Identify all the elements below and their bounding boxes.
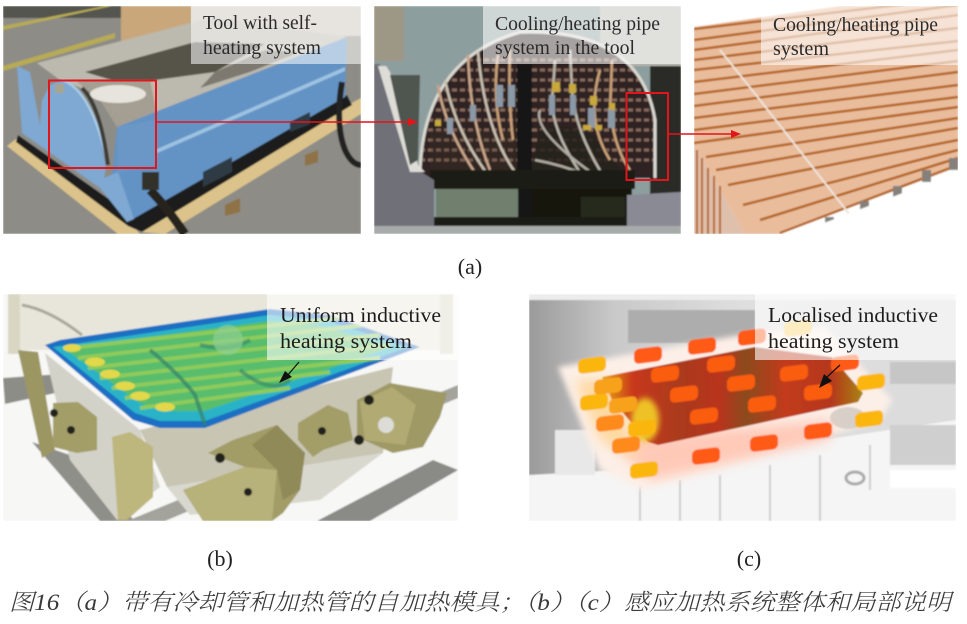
label text: heating system [280,329,412,353]
label text: Localised inductive [768,303,938,327]
label box [483,6,681,64]
pale plate [558,327,892,490]
heating tiles [578,319,885,479]
panel: uniform inductive heating [3,294,458,521]
wooden pallet [7,139,140,234]
caption (c): (c) [737,546,761,571]
panel: tool with self-heating system [3,6,361,234]
lower floor [436,189,518,217]
pipes [694,0,958,234]
arrow: pipe system to detail [626,93,741,180]
heat map [45,309,420,428]
centre post [517,64,532,234]
label text: Tool with self- [203,13,317,34]
panel: cooling/heating pipes in the tool [374,6,681,234]
label box [755,294,956,360]
soft glow [610,420,830,480]
black base [16,95,352,232]
pipe fittings [447,85,615,134]
panel: cooling/heating pipe system [694,0,958,234]
arrow: tool to pipe system [49,80,418,168]
power hoses [150,190,185,234]
label box [191,6,361,64]
caption (a): (a) [458,254,482,279]
copper and grey hoses [436,49,632,172]
coil ribs [420,60,660,160]
clamps [18,350,55,458]
steel top [37,22,346,112]
arrow: heat system pointer [279,362,299,383]
hot zone [602,347,863,445]
label text: heating system [203,38,321,59]
left and right frame [374,64,434,228]
label text: Cooling/heating pipe [773,14,938,36]
caption (b): (b) [207,546,233,571]
label box [761,6,958,65]
figure caption: 图16（a）带有冷却管和加热管的自加热模具；（b）（c）感应加热系统整体和局部说明 [9,590,954,615]
label text: system [773,38,829,60]
blue end plate [17,66,134,222]
panel: localised inductive heating [529,294,956,521]
label text: system in the tool [495,37,635,59]
arrow: localised pointer [819,365,840,388]
pale ridge [720,50,850,215]
wooden crate [121,6,191,42]
label text: Cooling/heating pipe [495,13,660,35]
floor and rail [32,442,135,521]
blue side [112,37,347,219]
label text: Uniform inductive [280,303,441,327]
bolts [825,158,958,229]
mould body [45,353,160,520]
label text: heating system [768,329,899,353]
arch interior [420,32,655,178]
label box [267,294,458,360]
